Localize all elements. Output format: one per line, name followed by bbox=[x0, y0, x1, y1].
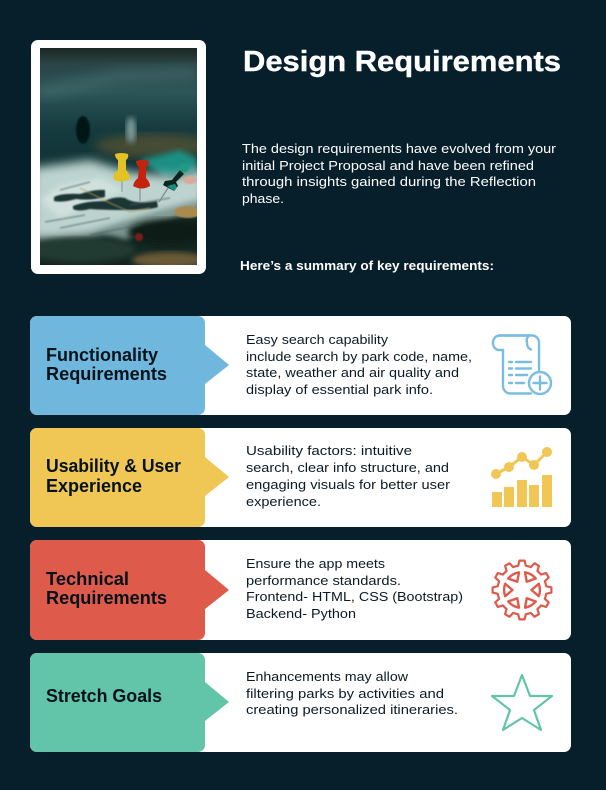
heading: usability bbox=[46, 456, 181, 496]
panel: stretch goals bbox=[30, 653, 571, 752]
icon: bar and line chart bbox=[491, 447, 552, 507]
text: stretch goals: creating personalized itineraries. bbox=[246, 702, 458, 717]
intro paragraph: phase. bbox=[242, 191, 284, 206]
intro paragraph: The design requirements have evolved from your bbox=[242, 141, 557, 156]
intro paragraph bbox=[242, 141, 557, 206]
panel: functionality requirements bbox=[30, 316, 571, 415]
text: stretch goals: Enhancements may allow bbox=[246, 669, 409, 684]
dark pin bbox=[159, 164, 188, 202]
text: functionality: state, weather and air quality and bbox=[246, 365, 459, 380]
heading: usability: Experience bbox=[46, 476, 142, 496]
text: usability bbox=[246, 443, 451, 509]
panel: usability and user experience bbox=[30, 428, 571, 527]
heading: technical: Technical bbox=[46, 569, 129, 589]
label tab: technical bbox=[30, 540, 229, 640]
icon: document scroll with plus bbox=[493, 336, 551, 394]
intro paragraph: through insights gained during the Reflection bbox=[242, 174, 536, 189]
text: technical: Ensure the app meets bbox=[246, 556, 386, 571]
intro paragraph: initial Project Proposal and have been refined bbox=[242, 158, 534, 173]
text: technical bbox=[246, 556, 463, 621]
text: usability: engaging visuals for better user bbox=[246, 477, 451, 492]
heading: functionality bbox=[46, 345, 167, 384]
heading: functionality: Functionality bbox=[46, 345, 158, 365]
heading: usability: Usability & User bbox=[46, 456, 181, 476]
heading: functionality: Requirements bbox=[46, 364, 167, 384]
summary heading: Here’s a summary of key requirements: bbox=[240, 258, 494, 273]
text: functionality: display of essential park info. bbox=[246, 382, 433, 397]
text: usability: Usability factors: intuitive bbox=[246, 443, 412, 458]
text: usability: experience. bbox=[246, 494, 321, 509]
label tab: stretch goals bbox=[30, 653, 229, 752]
label tab: functionality bbox=[30, 316, 229, 415]
yellow pin bbox=[113, 153, 130, 192]
title: Design Requirements bbox=[243, 46, 561, 78]
text: usability: search, clear info structure, and bbox=[246, 460, 449, 475]
heading: stretch goals: Stretch Goals bbox=[46, 686, 162, 706]
panel: technical requirements bbox=[30, 540, 571, 640]
icon: star bbox=[492, 675, 552, 730]
text: technical: Frontend- HTML, CSS (Bootstrap) bbox=[246, 589, 463, 604]
heading: technical bbox=[46, 569, 167, 608]
photo: map with push pins bbox=[25, 40, 215, 274]
text: technical: Backend- Python bbox=[246, 606, 356, 621]
text: stretch goals bbox=[246, 669, 458, 717]
text: functionality: Easy search capability bbox=[246, 332, 389, 347]
icon: gear bbox=[493, 561, 551, 619]
red pin bbox=[133, 160, 150, 201]
text: technical: performance standards. bbox=[246, 573, 401, 588]
label tab: usability bbox=[30, 428, 229, 527]
text: stretch goals: filtering parks by activities and bbox=[246, 686, 444, 701]
heading: technical: Requirements bbox=[46, 588, 167, 608]
text: functionality: include search by park code, name, bbox=[246, 349, 472, 364]
text: functionality bbox=[246, 332, 472, 397]
